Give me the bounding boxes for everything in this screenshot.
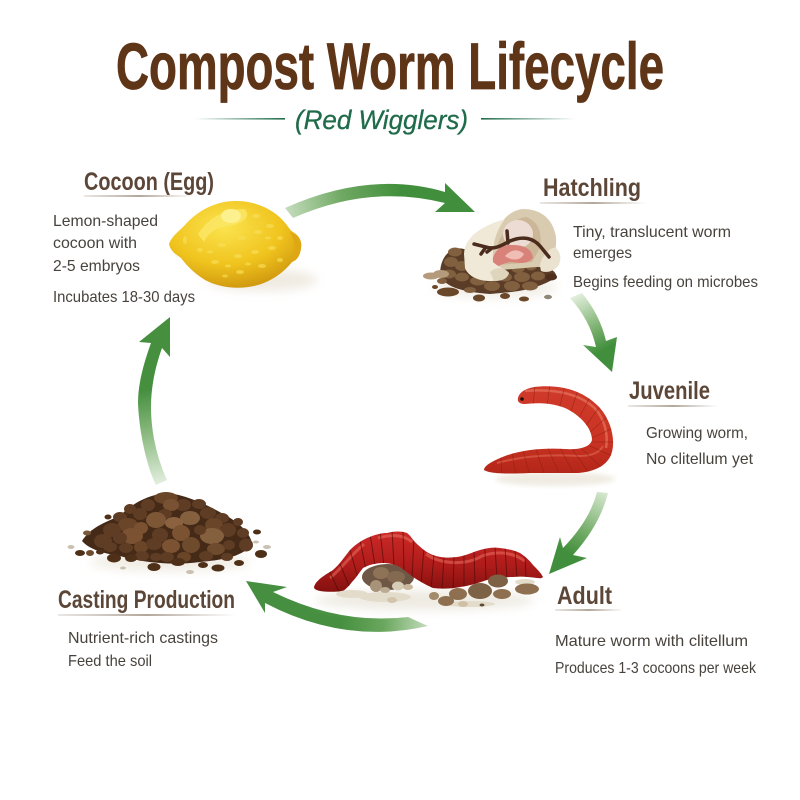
step: casting production — [58, 492, 271, 670]
step: adult — [314, 530, 757, 677]
shell back — [492, 209, 556, 270]
soil pebbles — [336, 579, 535, 607]
icon: castings pile — [68, 492, 271, 574]
arrow: juvenile to adult — [549, 492, 608, 574]
step: cocoon — [53, 168, 317, 306]
heading: juvenile: Juvenile — [629, 377, 710, 405]
icon: lemon cocoon — [169, 201, 317, 291]
text: hatchling description: emerges — [573, 245, 632, 262]
embryo — [503, 220, 533, 248]
text: hatchling description — [573, 224, 758, 291]
text: adult description: Produces 1-3 cocoons per week — [555, 660, 757, 677]
text: adult description: Mature worm with clitellum — [555, 633, 748, 650]
arrow: cocoon to hatchling — [285, 183, 475, 218]
text: casting description: Feed the soil — [68, 653, 152, 670]
twig — [474, 231, 549, 257]
text: juvenile description: Growing worm, — [646, 425, 748, 442]
arrow: hatchling to juvenile — [570, 293, 617, 372]
heading: cocoon: Cocoon (Egg) — [84, 168, 214, 196]
text: cocoon description: Incubates 18-30 days — [53, 289, 195, 306]
shell front — [464, 219, 509, 281]
text: casting description — [68, 630, 218, 670]
worm body — [314, 532, 543, 592]
subtitle: (Red Wigglers) — [295, 105, 468, 135]
text: juvenile description — [646, 425, 754, 468]
heading: adult: Adult — [557, 582, 613, 610]
text: casting description: Nutrient-rich castings — [68, 630, 218, 647]
text: cocoon description: 2-5 embryos — [53, 258, 140, 275]
text: adult description — [555, 633, 757, 677]
text: hatchling description: Begins feeding on microbes — [573, 274, 758, 291]
text: juvenile description: No clitellum yet — [646, 451, 754, 468]
step: juvenile — [484, 377, 754, 486]
step: hatchling — [423, 174, 758, 302]
icon: hatching cocoon on soil — [423, 209, 560, 302]
text: cocoon description: cocoon with — [53, 235, 137, 252]
arrow: castings to cocoon — [138, 317, 170, 485]
text: cocoon description — [53, 213, 195, 306]
icon: adult worm on soil — [314, 530, 543, 610]
arrow: adult to castings — [246, 581, 428, 632]
soil under arch — [362, 564, 414, 590]
heading: casting production: Casting Production — [58, 586, 235, 614]
soil pile — [440, 248, 556, 294]
text: cocoon description: Lemon-shaped — [53, 213, 158, 230]
icon: juvenile worm — [484, 384, 615, 486]
text: hatchling description: Tiny, translucent worm — [573, 224, 731, 241]
heading: hatchling: Hatchling — [543, 174, 641, 202]
